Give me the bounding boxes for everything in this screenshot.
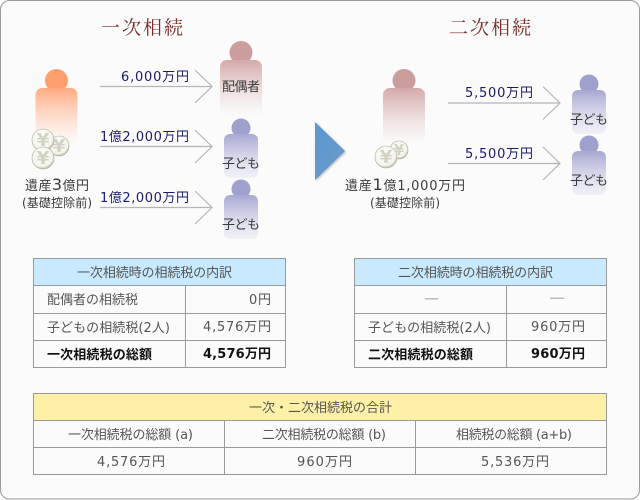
icon: child two: 子ども [222,218,260,233]
icon: coins first [32,129,69,169]
table: first breakdown: 0円 [249,293,271,308]
arrow: to child four [448,147,560,180]
title: first inheritance: 一次相続 [101,17,183,39]
arrow: first to second [315,122,345,180]
table: second breakdown: 二次相続税の総額 [368,347,473,363]
table: combined total: 二次相続税の総額 (b) [262,428,386,443]
icon: parent person orange [36,69,78,145]
table: combined total: 5,536万円 [481,455,549,470]
arrow: to child three [448,86,560,120]
label: estate first: (基礎控除前) [22,195,92,210]
table: first breakdown [34,258,286,368]
icon: coins first: ¥ [37,130,50,151]
arrow: to child four: 5,500万円 [465,147,533,162]
icon: coins second: ¥ [380,147,393,168]
icon: child one: 子ども [222,157,260,172]
icon: spouse person: 配偶者 [222,80,260,95]
table: combined total [34,394,606,474]
label: estate second: 遺産1億1,000万円 [345,175,465,194]
table: second breakdown: 二次相続時の相続税の内訳 [398,265,553,281]
table: first breakdown: 子どもの相続税(2人) [47,321,170,336]
arrow: to child two [100,191,212,224]
icon: child three: 子ども [570,113,608,128]
table: combined total: 相続税の総額 (a+b) [456,428,572,443]
table: first breakdown: 一次相続税の総額 [47,347,152,363]
icon: coins first: ¥ [37,148,50,169]
arrow: to child three: 5,500万円 [465,86,533,101]
label: estate first [22,175,92,210]
table: second breakdown: 960万円 [531,347,585,362]
label: estate second: (基礎控除前) [370,195,440,210]
table: first breakdown: 4,576万円 [203,347,271,362]
title: second inheritance: 二次相続 [449,17,531,39]
table: combined total: 960万円 [297,455,352,470]
table: second breakdown: 子どもの相続税(2人) [368,321,491,336]
icon: coins second: ¥ [394,141,405,159]
table: first breakdown: 一次相続時の相続税の内訳 [77,265,232,281]
icon: spouse person [220,41,262,117]
icon: child three [570,74,608,134]
table: combined total: 一次・二次相続税の合計 [249,400,392,416]
icon: child two [222,180,260,239]
arrow: to spouse: 6,000万円 [121,70,189,85]
table: second breakdown: 960万円 [531,320,585,335]
table: combined total: 一次相続税の総額 (a) [68,428,193,443]
table: combined total: 4,576万円 [97,455,165,470]
icon: parent person rose [383,69,425,145]
table: first breakdown: 4,576万円 [203,320,271,335]
icon: child one [222,118,260,178]
arrow: to spouse [100,70,212,103]
arrow: to child two: 1億2,000万円 [100,191,189,206]
label: estate first: 遺産3億円 [25,175,89,194]
icon: coins second [375,141,408,168]
icon: coins first: ¥ [53,136,66,157]
arrow: to child one [100,130,212,163]
table: first breakdown: 配偶者の相続税 [47,293,138,308]
table: second breakdown [354,258,606,368]
icon: child four [570,136,608,195]
label: estate second [345,175,465,210]
arrow: to child one: 1億2,000万円 [100,130,189,145]
icon: child four: 子ども [570,174,608,189]
